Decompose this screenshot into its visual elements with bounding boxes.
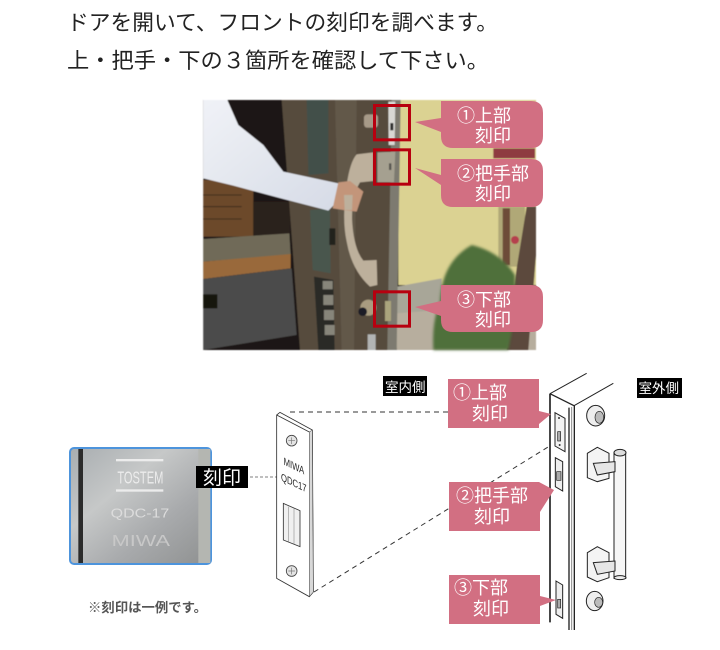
outdoor side label (637, 378, 682, 398)
label: handle stamp: 刻印 (474, 507, 510, 527)
callout: handle stamp (415, 159, 543, 207)
stamp close-up photo: QDC-17 (111, 507, 169, 521)
dashed leader: stamp to plate (250, 476, 282, 478)
middle strike on door (555, 458, 563, 491)
strike plate drawing: QDC17 (281, 471, 307, 496)
stamp close-up photo: TOSTEM (117, 467, 163, 487)
callout: upper stamp: 刻印 (475, 126, 511, 146)
dashed leaders: plate to door (290, 412, 548, 592)
indoor side label: 室内側 (385, 380, 426, 395)
callout: lower stamp (415, 285, 543, 332)
red frame: lower (374, 292, 409, 326)
upper strike on door (555, 413, 565, 452)
label: upper stamp: ①上部 (453, 383, 507, 403)
lower cylinder (586, 591, 603, 611)
lower strike on door (556, 581, 563, 618)
callout: upper stamp (415, 101, 543, 148)
label: upper stamp: 刻印 (472, 404, 508, 424)
strike plate drawing: MIWA (284, 456, 305, 478)
stamp label (196, 466, 248, 489)
heading line 2: 上・把手・下の３箇所を確認して下さい。 (67, 49, 489, 73)
callout: handle stamp: 刻印 (475, 184, 511, 204)
label: lower stamp: ③下部 (454, 578, 508, 598)
callout: upper stamp: ①上部 (457, 106, 511, 126)
heading line 1: ドアを開いて、フロントの刻印を調べます。 (67, 11, 498, 35)
red frame: upper (374, 105, 409, 140)
indoor side label (383, 376, 427, 396)
red frame: handle (374, 150, 409, 184)
label: lower stamp (449, 575, 556, 624)
label: handle stamp (449, 482, 554, 531)
footnote: ※刻印は一例です。 (88, 600, 207, 615)
callout: lower stamp: 刻印 (475, 310, 511, 330)
door edge drawing (550, 373, 626, 630)
callout: lower stamp: ③下部 (457, 290, 511, 310)
callout: handle stamp: ②把手部 (457, 164, 529, 184)
stamp close-up photo: MIWA (112, 533, 171, 550)
door photo (203, 100, 536, 350)
strike plate drawing (277, 412, 313, 597)
label: handle stamp: ②把手部 (456, 486, 528, 506)
stamp close-up photo (70, 448, 211, 564)
label: upper stamp (448, 379, 551, 428)
stamp label: 刻印 (203, 467, 241, 489)
outdoor side label: 室外側 (638, 381, 679, 396)
upper cylinder (587, 405, 605, 426)
label: lower stamp: 刻印 (473, 599, 509, 619)
pull handle (587, 447, 626, 582)
